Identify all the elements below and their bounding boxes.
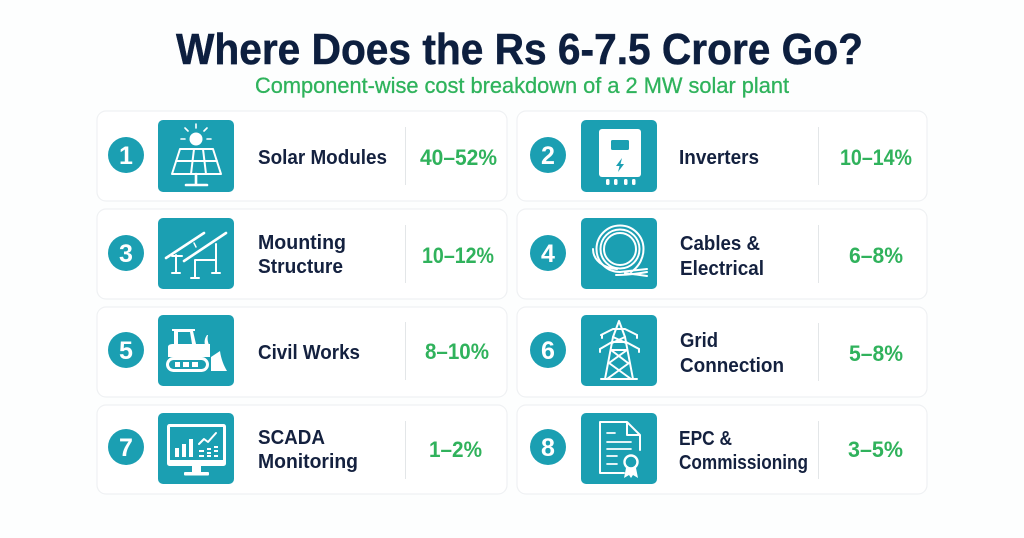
badge 7 (108, 429, 144, 465)
badge 1: 1 (119, 142, 133, 170)
icon: inverter (581, 120, 657, 192)
icon: document with seal (581, 413, 657, 484)
icon: mounting rails (158, 218, 234, 289)
icon: solar panel (158, 120, 234, 192)
label (679, 428, 808, 474)
panel: scada monitoring (97, 405, 507, 494)
label: Cables & (680, 233, 760, 255)
label: Grid (680, 330, 718, 352)
badge 2: 2 (541, 142, 555, 170)
panel: inverters (517, 111, 927, 201)
label (680, 233, 764, 280)
label: Connection (680, 355, 784, 377)
badge 4 (530, 235, 566, 271)
percentage: 40–52% (420, 145, 497, 170)
label: Electrical (680, 258, 764, 280)
panel: civil works (97, 307, 507, 397)
percentage: 3–5% (848, 437, 903, 462)
percentage: 5–8% (849, 341, 903, 366)
icon: transmission tower (581, 315, 657, 386)
badge 2 (530, 137, 566, 173)
icon: cable coil (581, 218, 657, 289)
percentage: 6–8% (849, 243, 903, 268)
label: Civil Works (258, 342, 360, 364)
label: SCADA (258, 427, 325, 449)
percentage: 1–2% (429, 437, 482, 462)
label (258, 232, 346, 278)
badge 8: 8 (541, 434, 555, 462)
badge 4: 4 (541, 240, 555, 268)
panel: epc and commissioning (517, 405, 927, 494)
badge 5 (108, 332, 144, 368)
icon: bulldozer (158, 315, 234, 386)
badge 1 (108, 137, 144, 173)
badge 6 (530, 332, 566, 368)
percentage: 8–10% (425, 339, 489, 364)
badge 6: 6 (541, 337, 555, 365)
panel: solar modules (97, 111, 507, 201)
label (258, 427, 358, 473)
badge 3: 3 (119, 240, 133, 268)
label: Mounting (258, 232, 346, 254)
label (680, 330, 784, 377)
label: Monitoring (258, 451, 358, 473)
percentage: 10–14% (840, 145, 912, 170)
panel: mounting structure (97, 209, 507, 299)
label: Structure (258, 256, 343, 278)
panel: grid connection (517, 307, 927, 397)
badge 7: 7 (119, 434, 133, 462)
badge 3 (108, 235, 144, 271)
badge 8 (530, 429, 566, 465)
label: Solar Modules (258, 147, 387, 169)
label: Commissioning (679, 452, 808, 474)
panel: cables and electrical (517, 209, 927, 299)
badge 5: 5 (119, 337, 133, 365)
icon: monitor with charts (158, 413, 234, 484)
percentage: 10–12% (422, 243, 494, 268)
title: Where Does the Rs 6-7.5 Crore Go? (176, 25, 863, 74)
label: Inverters (679, 147, 759, 169)
subtitle: Component-wise cost breakdown of a 2 MW solar plant (255, 73, 789, 98)
label: EPC & (679, 428, 732, 450)
